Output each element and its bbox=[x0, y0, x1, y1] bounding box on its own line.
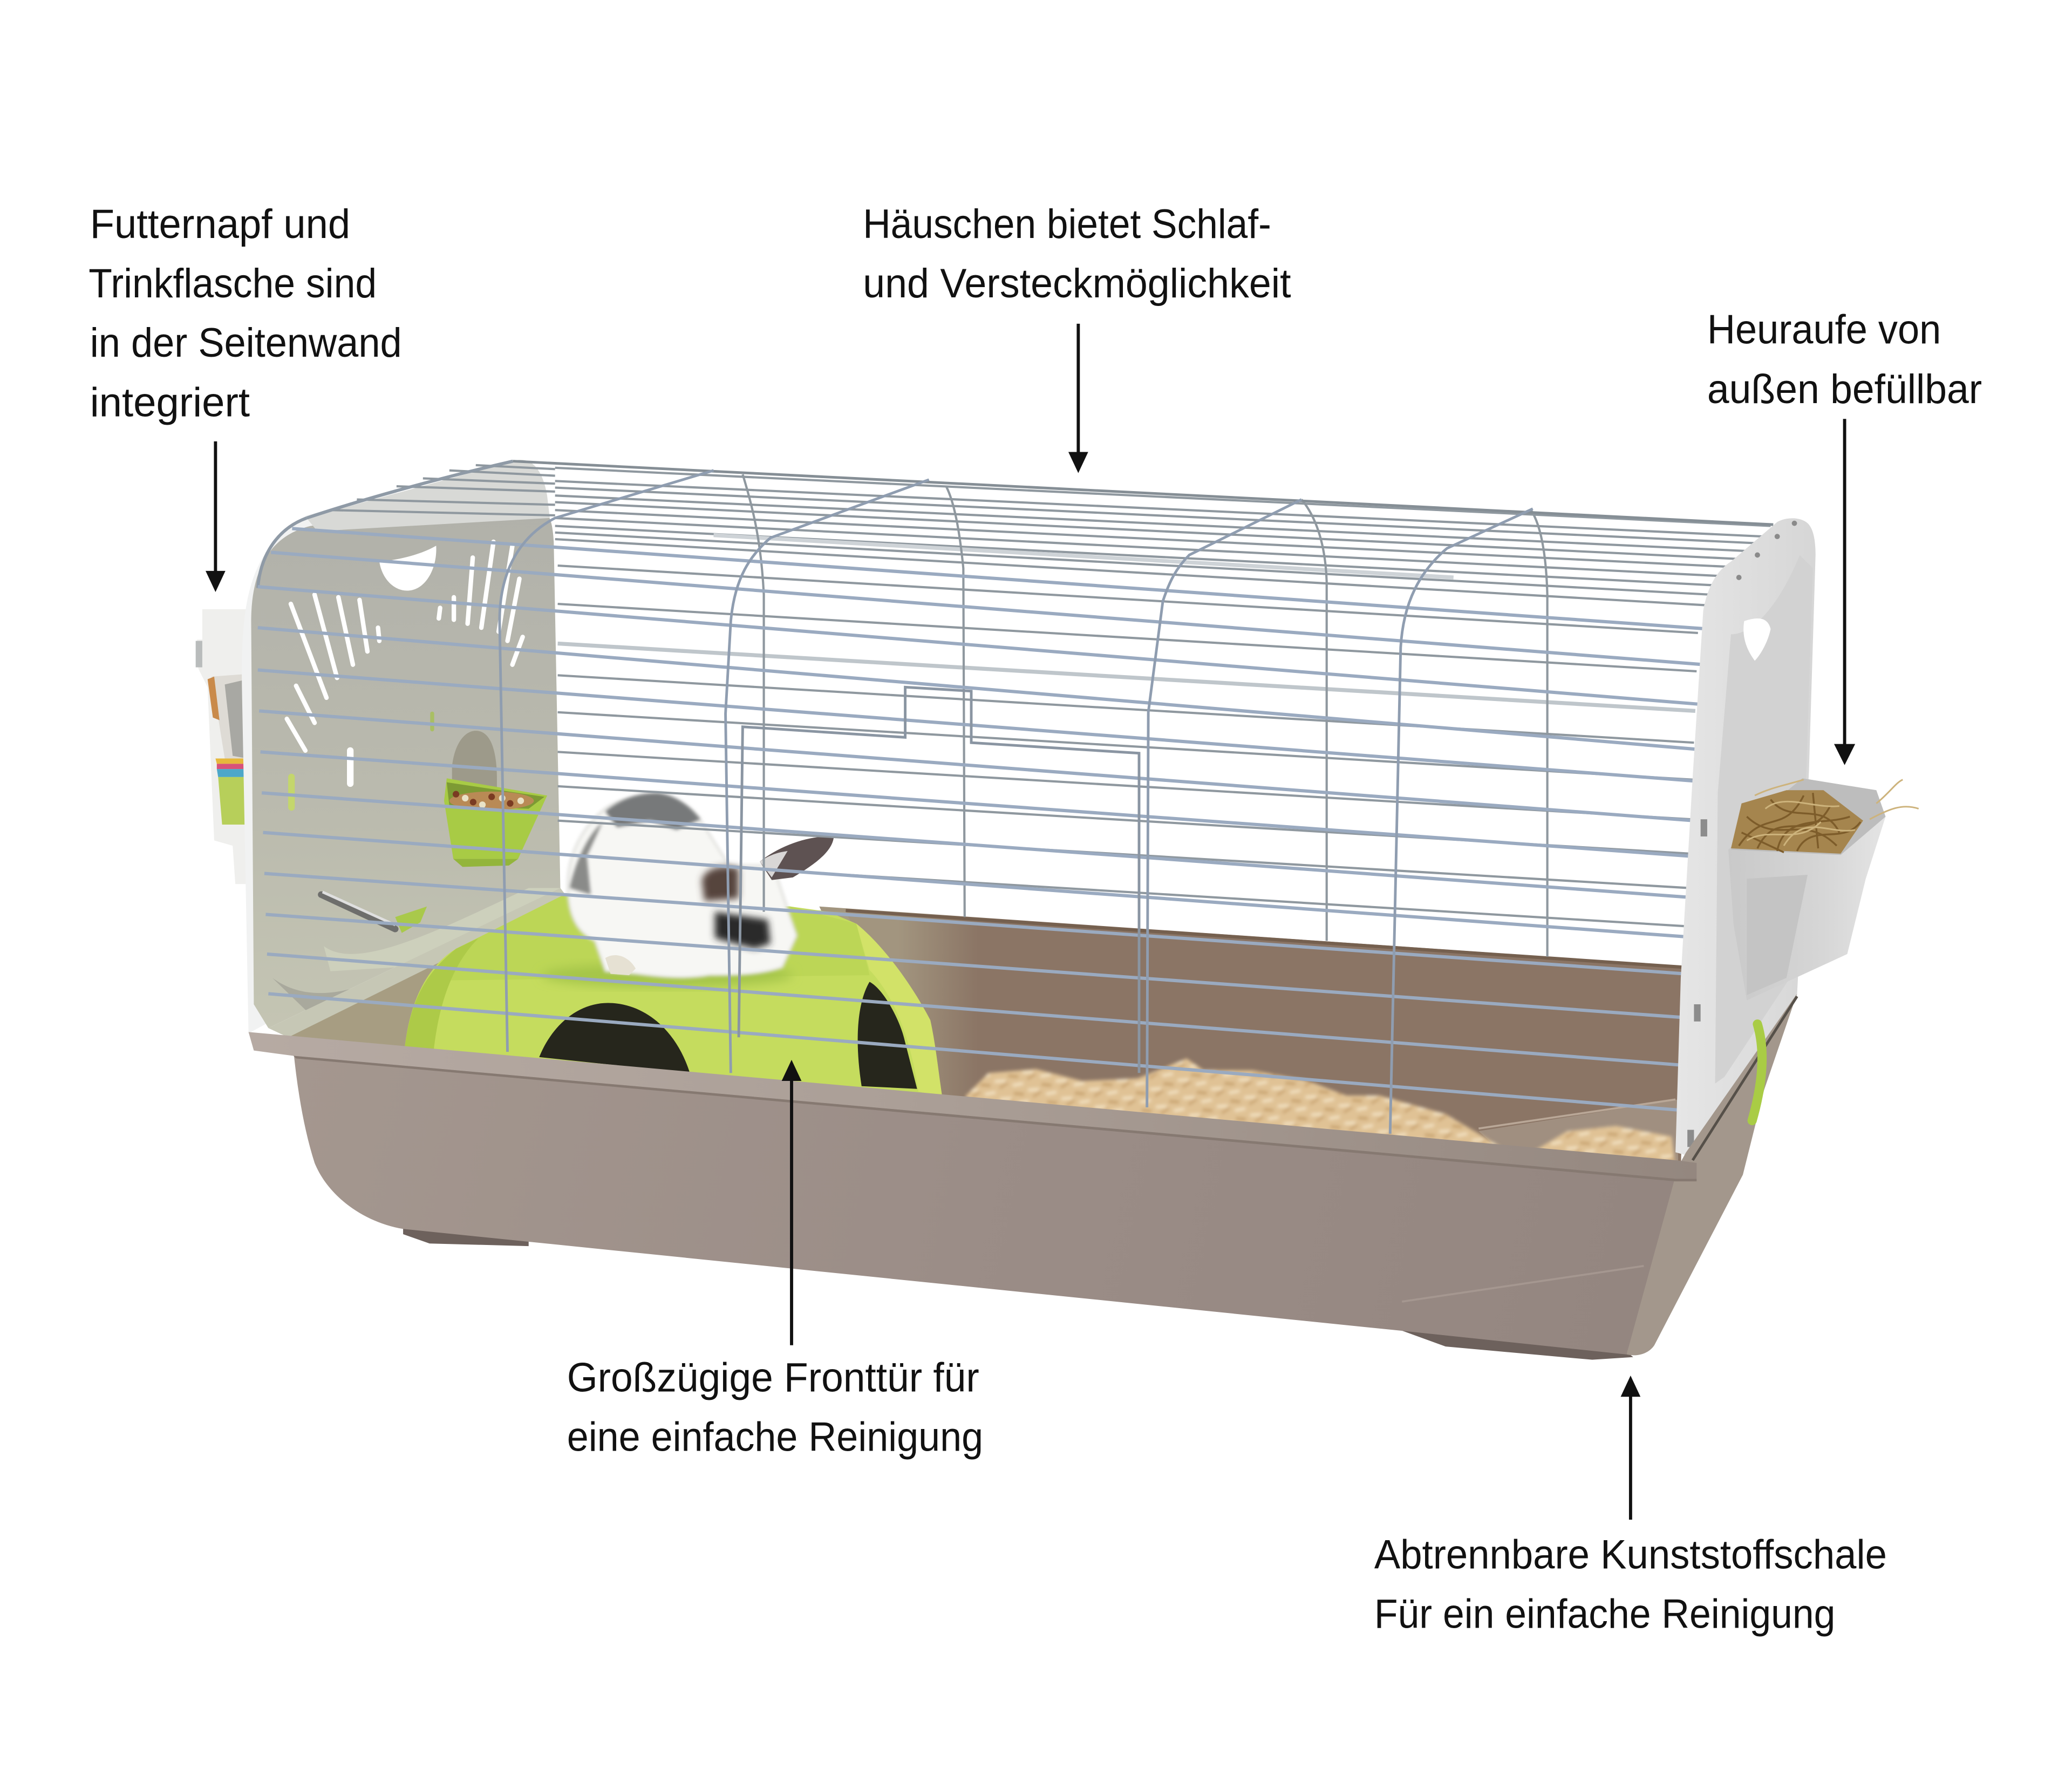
label: feed bowl and bottle: Trinkflasche sind bbox=[88, 261, 377, 307]
left side wall panel bbox=[242, 460, 560, 1033]
arrow: to house bbox=[1068, 324, 1088, 473]
rabbit shadow bbox=[542, 963, 793, 987]
label: hay rack: außen befüllbar bbox=[1707, 366, 1982, 412]
tray front bbox=[294, 1051, 1675, 1355]
green latch bbox=[1752, 1024, 1762, 1120]
arrow: to side wall bbox=[206, 441, 226, 592]
label: feed bowl and bottle: integriert bbox=[90, 379, 250, 425]
rabbit far ear bbox=[760, 836, 834, 880]
back horizontal wires bbox=[558, 566, 1698, 633]
label: little house bbox=[863, 201, 1291, 307]
house door front bbox=[539, 1003, 690, 1073]
label: little house: und Versteckmöglichkeit bbox=[863, 261, 1291, 307]
rabbit near ear bbox=[701, 867, 739, 901]
label: hay rack bbox=[1707, 307, 1982, 412]
arrow: to hay rack bbox=[1834, 419, 1855, 765]
arrow: to front door bbox=[782, 1060, 801, 1345]
cage interior bbox=[268, 793, 1685, 1176]
label: front door: Großzügige Fronttür für bbox=[567, 1355, 979, 1400]
label: front door bbox=[567, 1355, 983, 1460]
floor wedge bbox=[1478, 1099, 1678, 1169]
front arches bbox=[500, 471, 714, 1052]
label: plastic tray: Abtrennbare Kunststoffschale bbox=[1374, 1532, 1887, 1578]
plastic tray bbox=[249, 994, 1797, 1360]
panel cut-outs bbox=[287, 542, 523, 807]
green house bbox=[405, 896, 942, 1097]
beige floor corner bbox=[271, 899, 945, 1104]
rabbit face patch bbox=[715, 912, 771, 949]
house door side bbox=[858, 982, 917, 1089]
back wall bbox=[819, 907, 1685, 1176]
door frame bbox=[739, 687, 1139, 1073]
drinker tube bbox=[321, 892, 427, 933]
water bottle on left wall bbox=[196, 609, 251, 884]
rabbit bbox=[568, 793, 834, 977]
right end panel bbox=[1675, 518, 1816, 1156]
label: plastic tray bbox=[1374, 1532, 1887, 1637]
arrow: to plastic tray bbox=[1621, 1376, 1640, 1520]
roof and back wires bbox=[258, 461, 1773, 957]
back arches bbox=[742, 474, 764, 912]
hay bbox=[1731, 780, 1919, 854]
tray rim bbox=[249, 1032, 1696, 1179]
label: hay rack: Heuraufe von bbox=[1707, 307, 1941, 353]
wood shavings bbox=[965, 1058, 1675, 1166]
rabbit cage illustration bbox=[196, 460, 1919, 1360]
tray feet bbox=[403, 1223, 529, 1246]
hay rack bbox=[1728, 778, 1919, 1001]
label: little house: Häuschen bietet Schlaf- bbox=[863, 201, 1271, 247]
label: feed bowl and bottle: Futternapf und bbox=[90, 201, 350, 247]
tray right side bbox=[1627, 994, 1797, 1355]
front wires bbox=[258, 471, 1708, 1134]
label: feed bowl and bottle: in der Seitenwand bbox=[90, 320, 402, 366]
label: feed bowl and bottle bbox=[88, 201, 402, 425]
label: plastic tray: Für ein einfache Reinigung bbox=[1374, 1591, 1835, 1637]
food bowl hole bbox=[452, 731, 497, 814]
label: front door: eine einfache Reinigung bbox=[567, 1414, 983, 1460]
food bowl bbox=[444, 778, 547, 867]
